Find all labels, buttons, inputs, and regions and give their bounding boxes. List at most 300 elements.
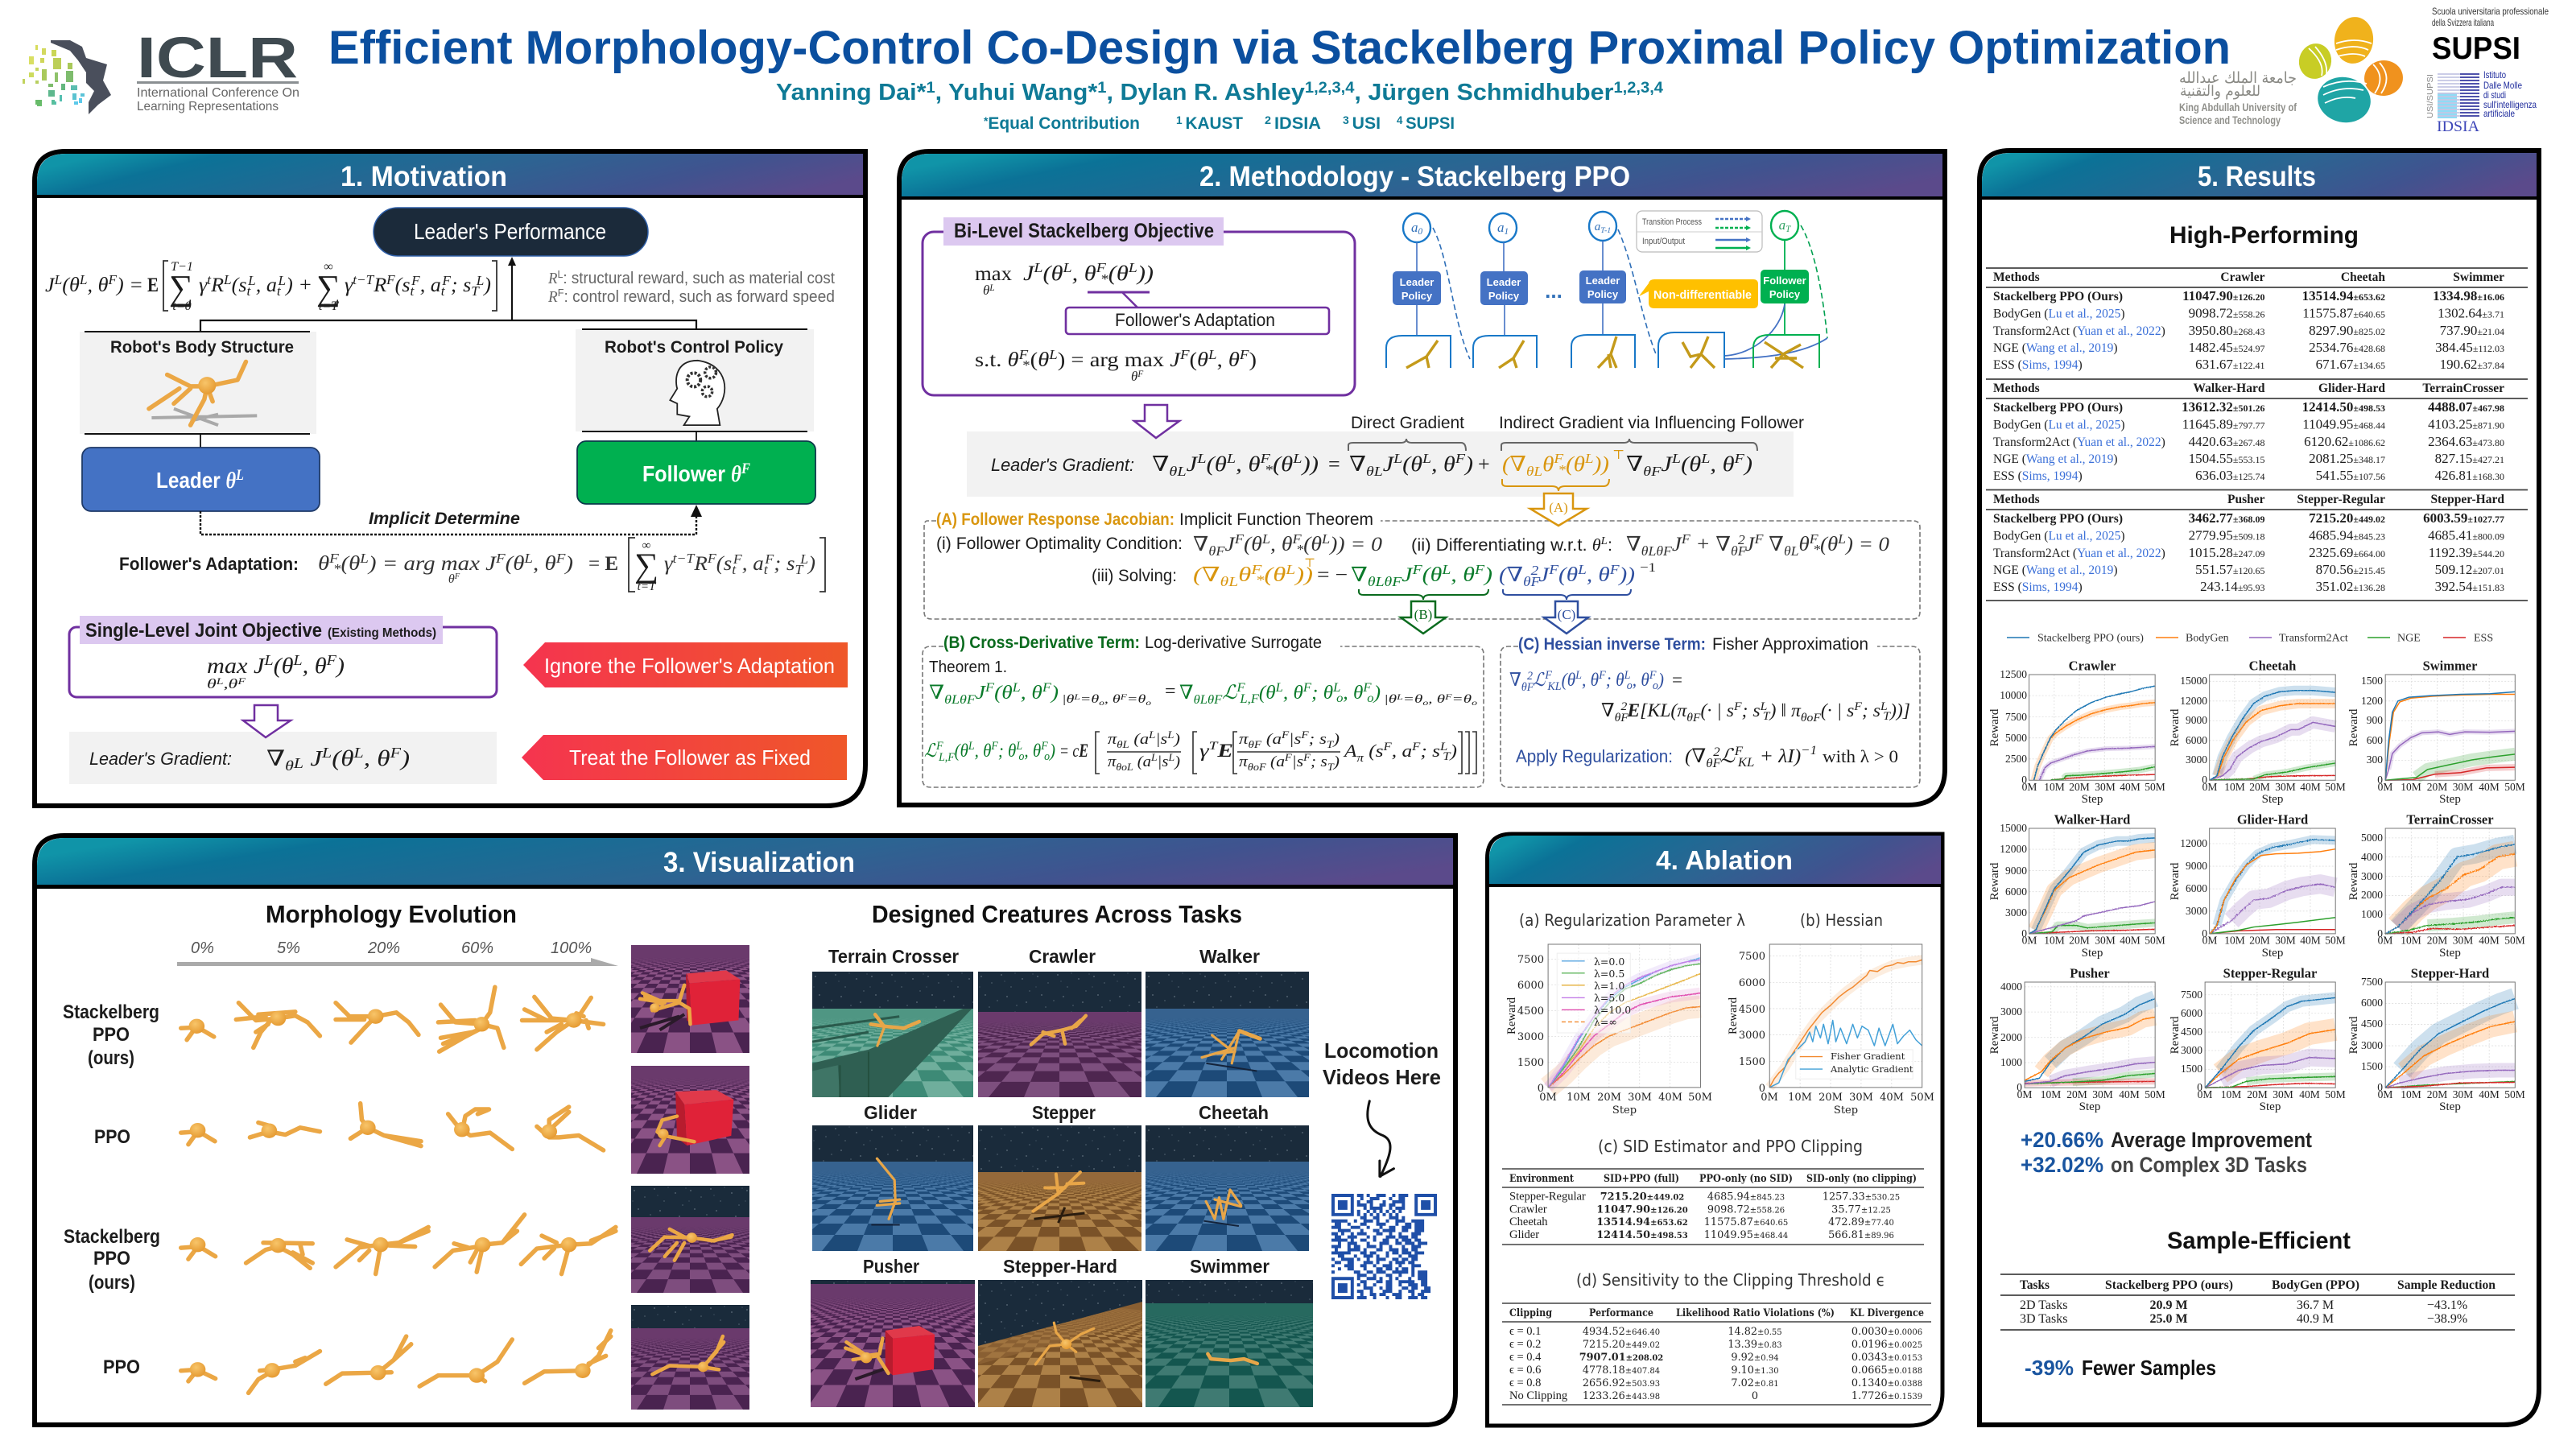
arrow: curly down to QR <box>1368 1101 1393 1176</box>
task labels: Crawler <box>1029 946 1096 967</box>
task labels: Stepper-Hard <box>1003 1256 1117 1277</box>
chart: Glider-Hard: Reward <box>2169 862 2182 900</box>
leader's performance pill <box>374 208 648 256</box>
table block: walker-hard, glider-hard, terraincrosser: 4103.25±871.90 <box>2428 417 2504 431</box>
leader's gradient decomposition: L <box>1226 451 1236 466</box>
box (B): cross-derivative term: L <box>1150 752 1158 763</box>
box (B): cross-derivative term: π <box>1239 753 1247 770</box>
chart: Stepper-Regular: 1500 <box>2181 1063 2202 1075</box>
chart: Stepper-Regular: 20M <box>2247 1088 2268 1100</box>
table (c): 472.89±77.40 <box>1828 1216 1894 1228</box>
chart: Swimmer: 900 <box>2367 714 2383 726</box>
row labels: Stackelberg <box>63 1001 159 1023</box>
chart: Swimmer: 300 <box>2367 753 2383 766</box>
row labels: PPO <box>93 1248 130 1269</box>
box (A): follower response jacobian: (θ <box>1244 534 1262 555</box>
leader's gradient decomposition: F <box>1259 451 1271 466</box>
leader's gradient decomposition: F <box>1553 451 1564 466</box>
arrow: implicit determine: Implicit Determine <box>369 510 520 528</box>
robot's control policy <box>576 329 814 431</box>
box (A): follower response jacobian: F <box>1681 531 1691 547</box>
box (A): follower response jacobian: (θ <box>1422 564 1442 586</box>
bi-level stackelberg objective: * <box>1022 357 1030 373</box>
chart: Swimmer <box>2347 658 2525 806</box>
action labels: a <box>1595 221 1600 233</box>
table (d): 0.0196±0.0025 <box>1852 1339 1922 1351</box>
box (A): follower response jacobian: : <box>1608 536 1612 555</box>
box (B): cross-derivative term: F <box>1444 693 1453 702</box>
policy boxes: ... <box>1545 279 1563 303</box>
chart: Cheetah: 30M <box>2275 781 2296 793</box>
robot's body structure <box>80 332 316 434</box>
bi-level stackelberg objective: (θ <box>1108 262 1129 285</box>
action labels: T-1 <box>1600 226 1611 235</box>
box (B): cross-derivative term: L <box>1015 739 1022 753</box>
table (d): Clipping <box>1509 1307 1552 1319</box>
chart: Crawler: 40M <box>2120 781 2140 793</box>
table block: pusher, stepper-regular, stepper-hard: 7215.20±449.02 <box>2309 510 2385 526</box>
table (d): ϵ = 0.6 <box>1509 1364 1541 1377</box>
chart: Cheetah: Step <box>2262 793 2283 806</box>
panel header: 3. Visualization <box>663 847 855 878</box>
box (A): follower response jacobian: J <box>1745 534 1757 555</box>
box (B): cross-derivative term: F <box>1119 693 1128 702</box>
table block: crawler, cheetah, swimmer: Methods <box>1993 270 2040 284</box>
chart: Crawler <box>1988 658 2165 806</box>
follower box: Follower θ <box>642 461 743 487</box>
box (B): cross-derivative term: π <box>1108 753 1116 770</box>
chart: Crawler: 0M <box>2022 781 2037 793</box>
logo: KAUST: Science and Technology <box>2179 114 2281 126</box>
reward definitions: : control reward, such as forward speed <box>564 288 835 306</box>
arrow: implicit determine <box>200 505 702 535</box>
chart: Crawler: Reward <box>1988 708 2001 746</box>
table (d): ϵ = 0.8 <box>1509 1377 1541 1389</box>
chart: Pusher: Reward <box>1988 1016 2001 1054</box>
box (B): cross-derivative term: (B) Cross-Derivative Term: <box>943 634 1140 652</box>
chart legend: BodyGen <box>2186 633 2229 644</box>
bi-level stackelberg objective: F <box>1179 347 1191 362</box>
logo: ICLR <box>23 27 299 114</box>
results table <box>1986 268 2528 601</box>
table block: crawler, cheetah, swimmer: 3950.80±268.43 <box>2189 323 2265 338</box>
policy boxes: Policy <box>1587 288 1619 300</box>
leader's gradient decomposition: , θ <box>1710 452 1735 476</box>
leader's gradient decomposition: L <box>1671 451 1681 466</box>
box (C): hessian inverse term: ℒ <box>1533 670 1546 690</box>
chart: Stepper-Regular: Reward <box>2169 1016 2182 1054</box>
follower box <box>577 441 815 504</box>
logo: IDSIA: sull'intelligenza <box>2483 99 2537 110</box>
locomotion videos callout: Videos Here <box>1323 1065 1441 1089</box>
box (B): cross-derivative term: L <box>1396 693 1404 702</box>
box (B): cross-derivative term: |θ <box>1384 693 1393 706</box>
chart: Glider-Hard: 50M <box>2325 934 2346 947</box>
table (c): 4685.94±845.23 <box>1707 1191 1785 1203</box>
chart legend: NGE <box>2397 633 2421 644</box>
single-level joint objective box: , θ <box>303 654 327 678</box>
table block: walker-hard, glider-hard, terraincrosser: 541.55±107.56 <box>2316 468 2385 483</box>
follower's adaptation equation: θ <box>318 553 328 575</box>
leader objective equation: t=T <box>319 299 339 313</box>
table (d): 2656.92±503.93 <box>1583 1377 1660 1389</box>
policy connector lines <box>1417 225 1827 359</box>
leader's gradient box: Leader's Gradient: <box>89 749 232 769</box>
box (B): cross-derivative term: o <box>1336 691 1343 705</box>
single-level joint objective box: (θ <box>274 654 294 678</box>
leader objective equation: ∑ <box>316 268 341 308</box>
box (B): cross-derivative term: (a <box>1266 753 1285 770</box>
affiliations: USI <box>1352 114 1381 133</box>
panel: 3. Visualization <box>32 833 1458 1427</box>
bi-level stackelberg objective: L <box>1062 260 1072 275</box>
action labels: a <box>1411 220 1418 235</box>
panel frame <box>35 151 865 806</box>
box (C): hessian inverse term: 2 <box>1527 669 1533 683</box>
leader's gradient decomposition: (θ <box>1402 452 1422 476</box>
table block: crawler, cheetah, swimmer: 1302.64±3.71 <box>2438 306 2504 320</box>
leader objective equation: L <box>54 272 62 287</box>
bi-level stackelberg objective: L <box>1033 260 1043 275</box>
leader's gradient decomposition: θF <box>1643 464 1662 479</box>
table (c): 1257.33±530.25 <box>1823 1191 1900 1203</box>
chart: Stepper-Regular: 10M <box>2221 1088 2241 1100</box>
table block: pusher, stepper-regular, stepper-hard: 4685.94±845.23 <box>2309 528 2385 543</box>
leader objective equation: t <box>441 283 445 299</box>
logo: IDSIA <box>2426 69 2537 135</box>
box (B): cross-derivative term: ) <box>1373 683 1381 704</box>
action labels: 1 <box>1504 227 1509 237</box>
chart: Swimmer: Step <box>2439 793 2461 806</box>
bi-level stackelberg objective: θ <box>1131 369 1137 384</box>
table block: pusher, stepper-regular, stepper-hard: 3462.77±368.09 <box>2189 510 2265 526</box>
stat: fewer samples: -39% <box>2025 1356 2074 1380</box>
box (B): cross-derivative term: , a <box>1392 741 1412 761</box>
authors: 1,2,3,4 <box>1613 80 1663 97</box>
leader objective equation: t <box>411 283 415 299</box>
table (d): 14.82±0.55 <box>1728 1326 1782 1338</box>
row labels: (ours) <box>89 1272 135 1294</box>
chart: Pusher: 3000 <box>2000 1005 2022 1018</box>
chart: Stepper-Regular: 50M <box>2325 1088 2346 1100</box>
follower's adaptation equation: * <box>333 561 341 576</box>
table block: pusher, stepper-regular, stepper-hard: Transform2Act (Yuan et al., 2022) <box>1993 547 2165 560</box>
box (B): cross-derivative term: T <box>1443 750 1451 763</box>
chart: Glider-Hard: 10M <box>2224 934 2245 947</box>
box (B): cross-derivative term: ℒ <box>924 741 938 761</box>
scene: walker <box>1146 972 1309 1097</box>
morphology creatures grid <box>181 987 616 1393</box>
logo: KAUST <box>2179 14 2405 127</box>
box (B): cross-derivative term: F <box>1382 741 1392 753</box>
bi-level stackelberg objective: , θ <box>1072 262 1096 285</box>
box (B): cross-derivative term: |s <box>1289 731 1301 748</box>
table (c): 13514.94±653.62 <box>1596 1216 1688 1228</box>
table (c): 9098.72±558.26 <box>1707 1204 1785 1216</box>
box (B): cross-derivative term: E <box>1216 741 1233 761</box>
box (A): follower response jacobian: (θ <box>1303 534 1322 555</box>
table block: crawler, cheetah, swimmer: Crawler <box>2220 270 2265 284</box>
chart (a): regularization parameter: 0 <box>1538 1083 1544 1095</box>
single-level joint objective box: L <box>215 677 224 687</box>
bi-level stackelberg objective: * <box>1100 271 1108 287</box>
leader objective equation: L <box>278 273 286 288</box>
table (d): 1.7726±0.1539 <box>1852 1390 1922 1402</box>
chart: Cheetah: 9000 <box>2186 714 2207 726</box>
chart: Cheetah: 3000 <box>2186 753 2207 766</box>
chart: Stepper-Hard: Step <box>2439 1100 2461 1113</box>
bi-level stackelberg objective: F <box>1239 347 1250 362</box>
chart: Stepper-Hard: 0 <box>2377 1081 2383 1093</box>
box (A): follower response jacobian: θF <box>1523 574 1541 589</box>
bi-level stackelberg objective: , <box>1217 349 1228 371</box>
chart: Crawler: 10M <box>2044 781 2065 793</box>
chart: Stepper-Hard: 3000 <box>2361 1039 2383 1051</box>
box (A): follower response jacobian: * <box>1813 542 1821 557</box>
chart (b): hessian: 6000 <box>1739 977 1765 989</box>
scene: stepper-hard <box>978 1280 1142 1407</box>
box (C): hessian inverse term: θF <box>1521 680 1534 694</box>
box (A): follower response jacobian: L <box>1261 531 1270 547</box>
box (B): cross-derivative term: θF <box>1248 739 1262 750</box>
chart: Cheetah: 6000 <box>2186 734 2207 746</box>
leader's gradient decomposition: )) <box>1300 452 1319 476</box>
chart: Stepper-Regular: 40M <box>2299 1088 2320 1100</box>
chart: Swimmer: 1200 <box>2361 695 2383 707</box>
arrow (B) <box>1401 601 1446 634</box>
chart: Cheetah: 15000 <box>2180 675 2207 687</box>
table block: pusher, stepper-regular, stepper-hard: 509.12±207.01 <box>2435 562 2504 577</box>
chart: Stepper-Regular: 7500 <box>2181 989 2202 1001</box>
chart: Swimmer: Reward <box>2347 708 2360 746</box>
policy boxes <box>1393 270 1809 305</box>
task labels <box>828 946 1269 1277</box>
task labels: Cheetah <box>1199 1102 1269 1123</box>
leader's gradient decomposition: Leader's Gradient: <box>991 455 1134 475</box>
table block: crawler, cheetah, swimmer: 384.45±112.03 <box>2435 340 2504 355</box>
chart: Walker-Hard: 6000 <box>2005 886 2027 898</box>
box (C): hessian inverse term: E <box>1626 700 1640 720</box>
follower's adaptation equation: ∞ <box>642 539 651 552</box>
chart: Stepper-Hard: 20M <box>2427 1088 2447 1100</box>
chart (b): hessian: 30M <box>1849 1092 1873 1104</box>
table block: walker-hard, glider-hard, terraincrosser: TerrainCrosser <box>2422 382 2504 395</box>
box (B): cross-derivative term: F <box>985 681 994 695</box>
leader's gradient decomposition: + <box>1478 452 1490 476</box>
leader objective equation: T <box>471 283 481 299</box>
action circles <box>1403 211 1798 242</box>
table block: pusher, stepper-regular, stepper-hard: ESS (Sims, 1994) <box>1993 580 2083 594</box>
box (A): follower response jacobian: ) <box>1483 564 1492 586</box>
box (A): follower response jacobian: 2 <box>1738 532 1745 547</box>
chart: Crawler: 0 <box>2021 774 2027 786</box>
leader objective equation: R <box>210 275 224 296</box>
chart: Glider-Hard: 3000 <box>2186 905 2207 917</box>
row labels: PPO <box>103 1356 140 1378</box>
box (B): cross-derivative term: T <box>1209 739 1219 753</box>
box (B): cross-derivative term: ∇ <box>1179 683 1193 704</box>
leader objective equation: ) + <box>284 275 312 296</box>
sample efficiency table: Stackelberg PPO (ours) <box>2105 1278 2233 1292</box>
row labels: (ours) <box>88 1047 134 1069</box>
scene: cheetah <box>1146 1125 1309 1251</box>
evolution timeline: 100% <box>551 939 592 957</box>
chart: Pusher: Step <box>2079 1100 2100 1113</box>
table block: pusher, stepper-regular, stepper-hard: Stepper-Hard <box>2430 493 2504 506</box>
box (B): cross-derivative term: ) <box>1448 741 1457 761</box>
affiliations: * <box>984 114 989 127</box>
table (d): 0.0665±0.0188 <box>1852 1364 1922 1377</box>
leader objective equation: J <box>45 275 54 296</box>
leader's gradient decomposition: , θ <box>1236 452 1261 476</box>
box (B): cross-derivative term <box>923 634 1484 787</box>
box (A): follower response jacobian: ∇ <box>1351 564 1364 586</box>
affiliations: 4 <box>1397 114 1406 126</box>
sample efficiency table <box>2000 1274 2515 1330</box>
chart: Swimmer: 0M <box>2378 781 2392 793</box>
bi-level stackelberg objective: s.t. θ <box>975 349 1018 371</box>
box (C): hessian inverse term: (C) Hessian inverse Term: <box>1518 635 1706 654</box>
table block: pusher, stepper-regular, stepper-hard: 551.57±120.65 <box>2195 562 2265 577</box>
box (A): follower response jacobian: θF <box>1208 543 1226 559</box>
box (B): cross-derivative term: , θ <box>1104 693 1121 706</box>
box (C): hessian inverse term: [KL(π <box>1640 700 1686 720</box>
leader objective equation: F <box>411 273 421 288</box>
bi-level stackelberg objective: F <box>1137 369 1143 379</box>
task labels: Stepper <box>1032 1102 1096 1123</box>
panel header <box>1487 836 1942 887</box>
chart: Walker-Hard: 40M <box>2120 934 2140 947</box>
table (c): Crawler <box>1509 1203 1547 1216</box>
leader's gradient decomposition: L <box>1393 451 1402 466</box>
bi-level stackelberg objective: θ <box>1038 349 1049 371</box>
box (B): cross-derivative term: o <box>1472 699 1477 708</box>
box (B): cross-derivative term: θoL <box>1116 762 1133 773</box>
chart: TerrainCrosser: 30M <box>2453 934 2473 947</box>
leader's gradient decomposition: ) <box>1463 452 1473 476</box>
row labels: Stackelberg <box>64 1226 160 1248</box>
box (B): cross-derivative term: ) <box>1174 753 1180 770</box>
box (C): hessian inverse term: L <box>1575 668 1582 682</box>
table (c): Glider <box>1509 1228 1539 1241</box>
table (c): 7215.20±449.02 <box>1600 1191 1684 1203</box>
box (B): cross-derivative term: , θ <box>975 741 991 761</box>
panel header: 1. Motivation <box>341 161 507 192</box>
box (B): cross-derivative term: L <box>1332 681 1341 695</box>
leader's gradient decomposition: F <box>1733 451 1744 466</box>
table block: crawler, cheetah, swimmer: 631.67±122.41 <box>2195 357 2265 372</box>
chart legend <box>2007 633 2493 644</box>
bi-level stackelberg objective: θ <box>1228 349 1240 371</box>
chart: Cheetah: 12000 <box>2180 695 2207 707</box>
sample efficiency table: −38.9% <box>2427 1312 2467 1326</box>
table title (c): (c) SID Estimator and PPO Clipping <box>1598 1137 1863 1156</box>
leader's gradient decomposition: Direct Gradient <box>1351 414 1464 432</box>
chart: Walker-Hard: 12000 <box>2000 843 2027 855</box>
logo: IDSIA: di studi <box>2483 89 2506 101</box>
sample efficiency table: 20.9 M <box>2149 1298 2188 1312</box>
affiliations: Equal Contribution <box>988 114 1140 133</box>
table block: pusher, stepper-regular, stepper-hard: 2325.69±664.00 <box>2309 545 2385 560</box>
authors: Yanning Dai* <box>776 80 919 105</box>
leader's gradient decomposition: L <box>1422 451 1431 466</box>
table block: walker-hard, glider-hard, terraincrosser: 827.15±427.21 <box>2435 451 2504 466</box>
table block: pusher, stepper-regular, stepper-hard: 1015.28±247.09 <box>2189 545 2265 560</box>
chart: Walker-Hard: 20M <box>2069 934 2090 947</box>
task labels: Walker <box>1199 946 1260 967</box>
chart: Swimmer: 50M <box>2504 781 2525 793</box>
box (B): cross-derivative term: F <box>1236 681 1245 695</box>
box (A): follower response jacobian: L <box>1441 562 1451 577</box>
box (C): hessian inverse term: (· | s <box>1700 700 1734 720</box>
chart legend: ESS <box>2474 633 2493 644</box>
table block: walker-hard, glider-hard, terraincrosser: ESS (Sims, 1994) <box>1993 469 2083 483</box>
chart: Stepper-Regular: 30M <box>2273 1088 2293 1100</box>
chart (a): regularization parameter: λ=1.0 <box>1594 980 1624 992</box>
chart: Walker-Hard: 0M <box>2022 934 2037 947</box>
box (A): follower response jacobian: J <box>1402 564 1414 586</box>
chart (b): hessian: 4500 <box>1739 1004 1765 1016</box>
bi-level stackelberg objective <box>923 217 1355 395</box>
chart: TerrainCrosser: 2000 <box>2361 889 2383 901</box>
box (C): hessian inverse term: L <box>1624 668 1630 682</box>
leader's gradient box: L <box>293 755 303 771</box>
table (c): 35.77±12.25 <box>1831 1204 1891 1216</box>
box (A): follower response jacobian: F <box>1250 562 1263 577</box>
chart: Walker-Hard: 30M <box>2095 934 2116 947</box>
table block: crawler, cheetah, swimmer: BodyGen (Lu et al., 2025) <box>1993 308 2125 320</box>
box (A): follower response jacobian: (i) Follower Optimality Condition: <box>936 535 1183 553</box>
table block: walker-hard, glider-hard, terraincrosser: 4488.07±467.98 <box>2428 399 2504 415</box>
box (A): follower response jacobian: L <box>1577 562 1587 577</box>
follower's adaptation equation: R <box>693 553 708 575</box>
leader's gradient box: L <box>353 745 364 761</box>
follower's adaptation equation: Follower's Adaptation: <box>119 554 299 574</box>
leader's gradient decomposition: θL <box>1526 464 1542 479</box>
heading: sample-efficient: Sample-Efficient <box>2167 1228 2351 1254</box>
scene: pusher <box>811 1280 975 1407</box>
chart: Glider-Hard: 40M <box>2300 934 2321 947</box>
table block: pusher, stepper-regular, stepper-hard: 2779.95±509.18 <box>2189 528 2265 543</box>
box (C): hessian inverse term: F <box>1734 745 1744 758</box>
box (C): hessian inverse term: ))] <box>1889 700 1910 720</box>
chart: Stepper-Regular: 3000 <box>2181 1044 2202 1056</box>
box (C): hessian inverse term: 2 <box>1713 745 1720 759</box>
task labels: Glider <box>864 1102 917 1123</box>
chart: Glider-Hard: 30M <box>2275 934 2296 947</box>
chart: Pusher: 40M <box>2119 1088 2140 1100</box>
chart (a): regularization parameter: 6000 <box>1517 980 1544 992</box>
table block: walker-hard, glider-hard, terraincrosser: 2081.25±348.17 <box>2309 451 2385 466</box>
box (A): follower response jacobian: L <box>1285 562 1295 577</box>
chart (b): hessian: 0 <box>1759 1083 1765 1095</box>
box (C): hessian inverse term: T <box>1883 709 1892 723</box>
box (A): follower response jacobian: 2 <box>1531 563 1538 578</box>
leader objective equation: E <box>147 275 159 296</box>
box (A): follower response jacobian: J <box>1538 564 1550 586</box>
chart: Glider-Hard: 20M <box>2249 934 2270 947</box>
QR code <box>1331 1195 1435 1298</box>
table (d) <box>1502 1303 1931 1405</box>
bi-level stackelberg objective: L <box>989 283 995 293</box>
box (B): cross-derivative term: π <box>1357 752 1364 765</box>
follower's adaptation equation: F <box>454 572 460 581</box>
table (d): 7.02±0.81 <box>1731 1377 1779 1389</box>
table (d): Performance <box>1589 1307 1653 1319</box>
box (B): cross-derivative term: ) <box>1333 753 1340 770</box>
box (B): cross-derivative term: o <box>1367 691 1374 705</box>
table (d): 0 <box>1752 1390 1758 1402</box>
